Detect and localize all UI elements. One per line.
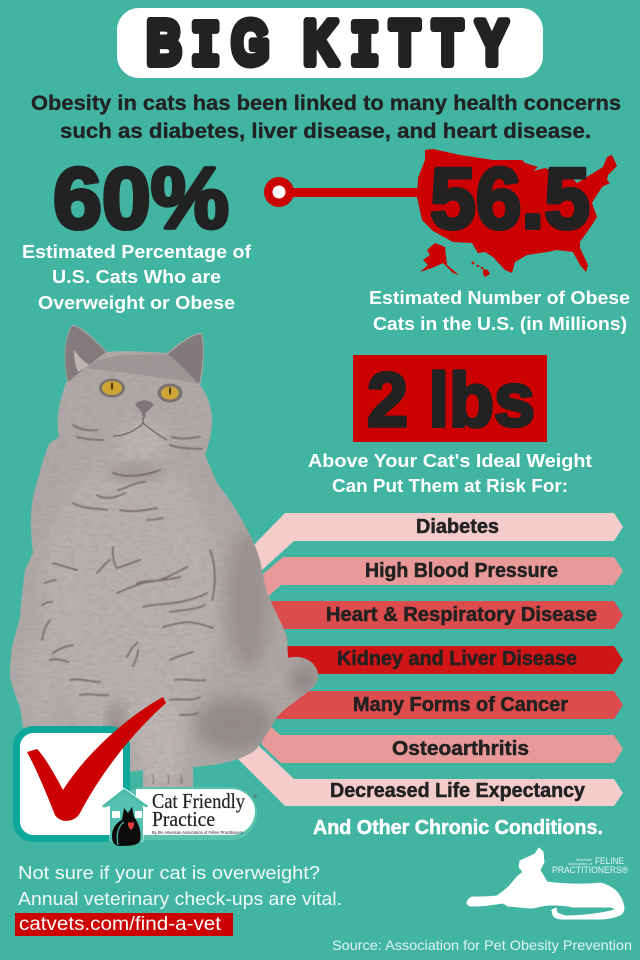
vet check-up note: Annual veterinary check-ups are vital.	[18, 889, 342, 909]
stat: 60 percent	[22, 151, 252, 313]
logo wordmark	[552, 856, 628, 875]
ribbon: osteoarthritis: Osteoarthritis	[392, 738, 529, 760]
title banner: I	[191, 13, 220, 83]
title banner	[117, 8, 543, 83]
intro text: such as diabetes, liver disease, and heart disease.	[60, 120, 591, 143]
source credit: Source: Association for Pet Obesity Prevention	[332, 937, 632, 953]
title banner: T	[390, 8, 420, 77]
badge wordmark: By the American Association of Feline Practitioners	[152, 830, 244, 835]
badge black cat icon	[112, 807, 141, 846]
stat caption: percentage: U.S. Cats Who are	[52, 266, 221, 287]
checkbox with check mark	[16, 697, 166, 838]
badge wordmark: Practice	[152, 807, 215, 831]
intro text: Obesity in cats has been linked to many health concerns	[31, 92, 621, 115]
badge house icon	[101, 788, 149, 841]
badge wordmark	[152, 789, 258, 835]
risk ribbons	[236, 513, 623, 806]
stat: 2 lbs: 2 lbs	[367, 358, 535, 443]
stat caption: number of cats	[369, 287, 630, 334]
logo wordmark: Association of	[568, 862, 593, 866]
ribbon: many forms of cancer: Many Forms of Cancer	[353, 694, 568, 716]
title banner: Y	[476, 8, 508, 77]
Cat Friendly Practice badge	[101, 787, 258, 846]
ribbon: high blood pressure	[262, 557, 623, 602]
title banner: I	[350, 13, 379, 83]
ribbon: many forms of cancer	[260, 691, 623, 719]
logo wordmark: PRACTITIONERS®	[552, 865, 628, 875]
title banner: B	[147, 8, 182, 77]
risk intro text	[308, 451, 592, 496]
stat: 56.5 million	[369, 151, 630, 334]
ribbon: heart and respiratory disease: Heart & Respiratory Disease	[326, 604, 597, 626]
map of the United States	[417, 149, 617, 277]
ribbon: high blood pressure: High Blood Pressure	[365, 560, 558, 582]
stat caption: percentage: Overweight or Obese	[38, 292, 235, 313]
stat caption: percentage	[22, 241, 252, 313]
badge wordmark: ®	[253, 794, 258, 801]
risk intro text: Can Put Them at Risk For:	[332, 476, 568, 496]
ribbon: decreased life expectancy: Decreased Life Expectancy	[330, 780, 586, 802]
stat: 60 percent: 60%	[53, 151, 229, 247]
intro text	[31, 92, 621, 143]
ribbon: diabetes	[240, 513, 623, 590]
stat: 56.5 million: 56.5	[430, 151, 590, 247]
logo wordmark: FELINE	[595, 856, 624, 866]
vet check-up note: Not sure if your cat is overweight?	[18, 863, 320, 883]
badge wordmark: Cat Friendly	[152, 789, 245, 813]
other conditions text: And Other Chronic Conditions.	[313, 817, 603, 839]
ribbon: osteoarthritis	[262, 718, 623, 763]
cat eyes	[99, 378, 182, 402]
vet check-up note	[18, 863, 342, 909]
cat fur wrinkles	[42, 425, 215, 784]
ribbon: kidney and liver disease	[270, 646, 623, 674]
cat photo illustration	[10, 325, 318, 787]
Feline Practitioners logo	[467, 848, 628, 919]
logo wordmark: American	[576, 858, 592, 862]
ribbon: heart and respiratory disease	[260, 601, 623, 629]
risk intro text: Above Your Cat's Ideal Weight	[308, 451, 592, 471]
stat caption: number of cats: Estimated Number of Obese	[369, 287, 630, 308]
ribbon: kidney and liver disease: Kidney and Liver Disease	[337, 648, 577, 670]
title banner: G	[232, 8, 269, 77]
stat caption: number of cats: Cats in the U.S. (in Millions)	[373, 313, 627, 334]
cat nose and mouth	[113, 400, 167, 440]
title banner: K	[303, 8, 338, 77]
cat ears	[65, 326, 203, 384]
connector line with ring	[264, 177, 425, 207]
title banner: T	[433, 8, 462, 77]
find a vet link: catvets.com/find-a-vet	[19, 914, 222, 935]
ribbon: diabetes: Diabetes	[416, 516, 499, 538]
ribbon: decreased life expectancy	[236, 728, 623, 806]
stat caption: percentage: Estimated Percentage of	[22, 241, 252, 262]
